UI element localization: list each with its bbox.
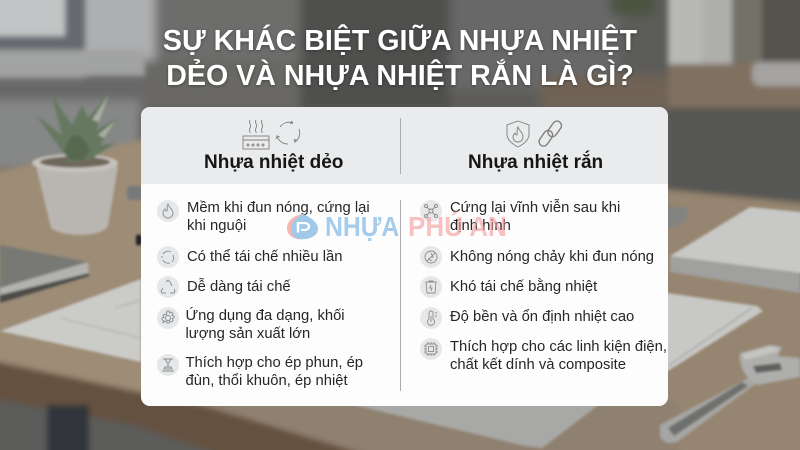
list item: does not melt: [420, 246, 654, 268]
small object: [127, 186, 143, 200]
table front edge and floor: [0, 360, 385, 450]
icon: chain link: [538, 120, 562, 147]
title: [163, 24, 638, 92]
icon: logo drop: [287, 214, 318, 240]
text: lượng sản xuất lớn: [186, 326, 310, 342]
heading: thermoplastic: Nhựa nhiệt dẻo: [204, 152, 343, 173]
icon: chip: [420, 338, 442, 360]
text: định hình: [450, 218, 511, 234]
list item: easy to recycle: [157, 276, 291, 298]
icon: potted plant: [32, 95, 118, 235]
text: Độ bền và ổn định nhiệt cao: [450, 309, 634, 325]
icon: cycle: [157, 246, 179, 268]
icon: press mold: [157, 354, 179, 376]
icon: heater with steam: [242, 120, 270, 150]
heading: thermoset: Nhựa nhiệt rắn: [468, 152, 603, 173]
list item: diverse applications: [157, 307, 345, 342]
text: Dễ dàng tái chế: [187, 279, 291, 295]
icon: network node: [420, 200, 442, 222]
text: Thích hợp cho các linh kiện điện,: [450, 339, 667, 355]
watermark logo: [287, 211, 507, 242]
list item: suited processes: [157, 354, 363, 389]
title: DẺO VÀ NHỰA NHIỆT RẮN LÀ GÌ?: [166, 60, 634, 92]
icon: thermometer: [420, 307, 442, 329]
divider: [400, 118, 401, 174]
text: [187, 200, 370, 234]
notepad stack: [670, 256, 800, 293]
icon: recycle triangle: [157, 276, 179, 298]
icon: shield with flame: [506, 120, 530, 148]
window: [0, 0, 65, 36]
paper lower right: [660, 292, 763, 376]
text: Ứng dụng đa dạng, khối: [186, 308, 345, 324]
table: [0, 138, 150, 400]
text: đùn, thổi khuôn, ép nhiệt: [186, 373, 348, 389]
list item: permanently hardens: [420, 199, 620, 234]
panel: card header band: [141, 107, 668, 184]
text: Khó tái chế bằng nhiệt: [450, 279, 597, 295]
paper lower centre: [350, 404, 600, 448]
icon: bin: [420, 276, 442, 298]
icon: recycle arrows: [276, 120, 300, 144]
text: Mềm khi đun nóng, cứng lại: [187, 200, 370, 216]
list item: hard to recycle: [420, 276, 598, 298]
list item: durability: [420, 307, 634, 329]
paper lower left: [0, 279, 141, 362]
icon: gear: [157, 307, 179, 329]
text: khi nguội: [187, 218, 246, 234]
watermark text: blue: NHỰA: [325, 211, 399, 242]
text: Thích hợp cho ép phun, ép: [186, 355, 363, 371]
panel: comparison card: [141, 107, 668, 406]
text: [450, 339, 667, 373]
text: Cứng lại vĩnh viễn sau khi: [450, 200, 620, 216]
list item: recyclable many times: [157, 246, 342, 268]
list item: electronics: [420, 338, 667, 373]
text: chất kết dính và composite: [450, 357, 626, 373]
text: [186, 307, 345, 342]
book: [0, 245, 88, 302]
title: SỰ KHÁC BIỆT GIỮA NHỰA NHIỆT: [163, 25, 637, 57]
icon: no melt: [420, 246, 442, 268]
list item: soft when heated: [157, 200, 370, 234]
watermark text: pink: PHÚ AN: [408, 211, 507, 242]
gadget behind card: [660, 205, 688, 232]
icon: flame: [157, 200, 179, 222]
icon: wrench: [660, 345, 800, 443]
binders and shelf right: [668, 60, 800, 110]
text: [450, 199, 620, 234]
text: [186, 355, 363, 389]
text: Có thể tái chế nhiều lần: [187, 249, 342, 265]
text: Không nóng chảy khi đun nóng: [450, 249, 654, 265]
